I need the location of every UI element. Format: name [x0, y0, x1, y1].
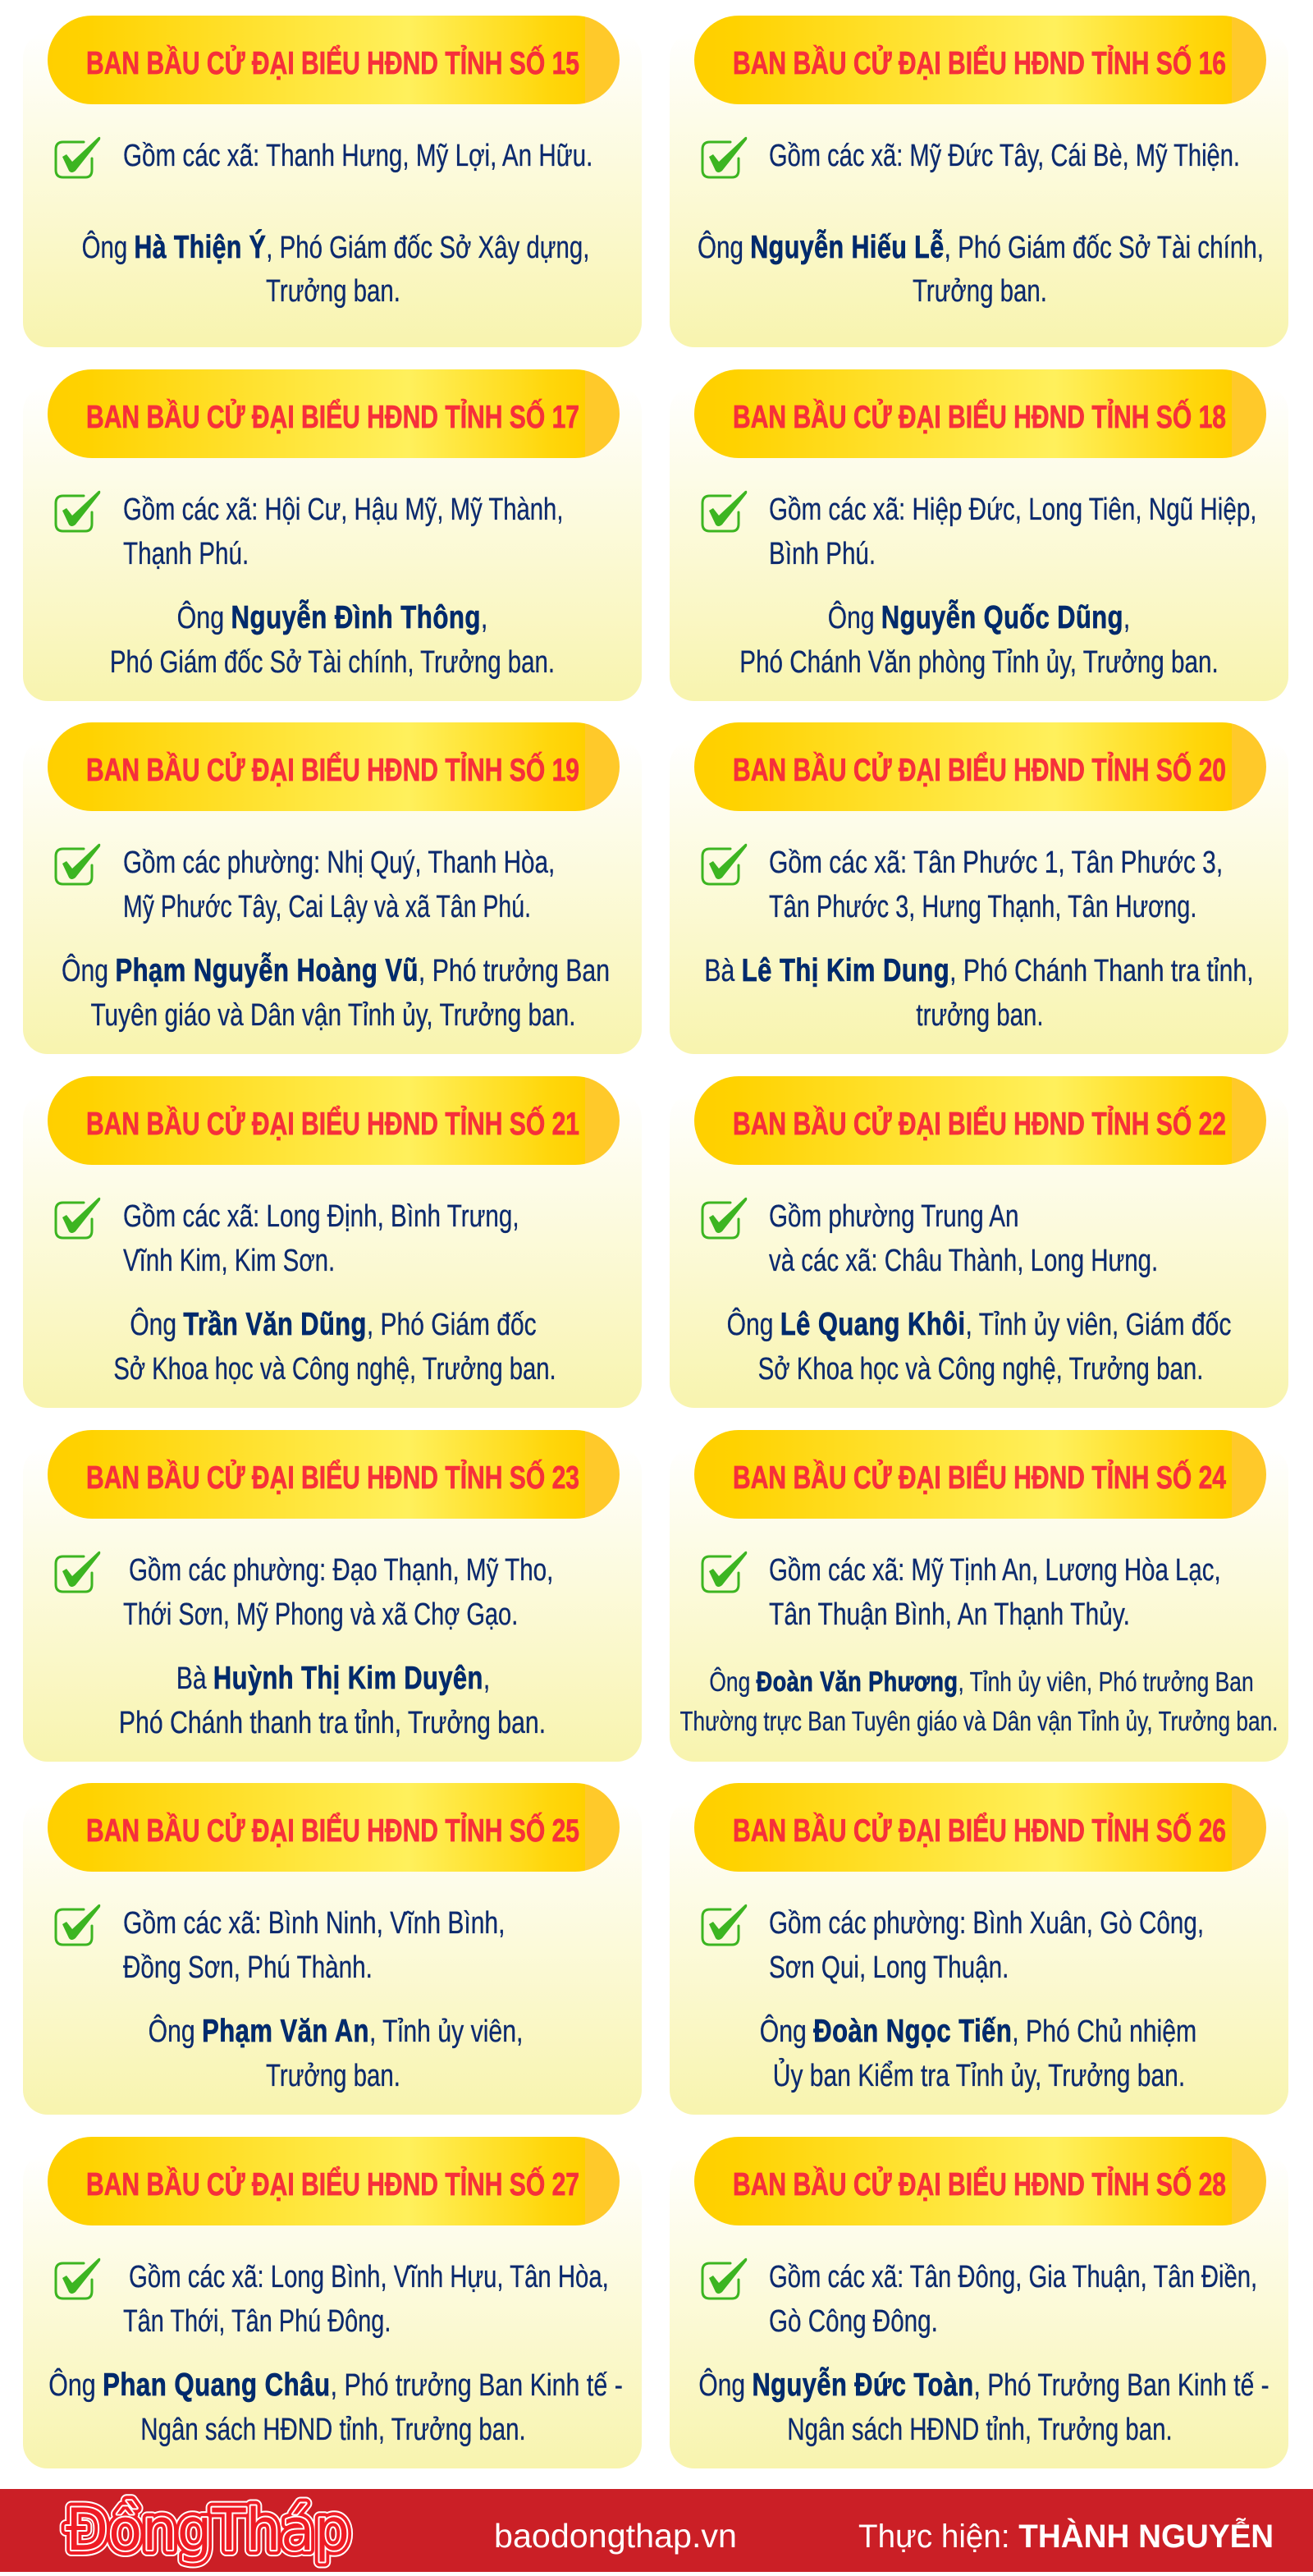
- credit: Thực hiện: THÀNH NGUYỄN: [858, 2518, 1274, 2555]
- icon: check: [702, 1904, 747, 1945]
- text: head line 2: Phó Chánh Văn phòng Tỉnh ủy, Trưởng ban.: [739, 645, 1219, 680]
- panel background and header pill: [23, 2137, 642, 2468]
- panel: ban 20: [670, 722, 1288, 1054]
- heading: BAN BẦU CỬ ĐẠI BIỂU HĐND TỈNH SỐ 17: [86, 398, 579, 435]
- panel: ban 28: [670, 2137, 1288, 2468]
- heading: BAN BẦU CỬ ĐẠI BIỂU HĐND TỈNH SỐ 27: [86, 2166, 579, 2202]
- text: head line 1: Ông Đoàn Văn Phương, Tỉnh ủy viên, Phó trưởng Ban: [709, 1666, 1254, 1698]
- text: head line 2: Sở Khoa học và Công nghệ, Trưởng ban.: [113, 1351, 556, 1387]
- text: area: Gồm các xã: Thanh Hưng, Mỹ Lợi, An Hữu.: [123, 139, 592, 173]
- text: area: Gồm các phường: Bình Xuân, Gò Công,: [769, 1906, 1204, 1941]
- text: area line 2: Tân Thuận Bình, An Thạnh Thủy.: [769, 1597, 1130, 1632]
- footer: [0, 2489, 1313, 2572]
- logo: ĐồngTháp: [66, 2496, 350, 2564]
- text: area: Gồm các xã: Bình Ninh, Vĩnh Bình,: [123, 1906, 505, 1941]
- icon: check: [702, 137, 747, 177]
- panel background and header pill: [23, 1430, 642, 1762]
- panel: ban 25: [23, 1783, 642, 2115]
- icon: check: [702, 2258, 747, 2299]
- text: area line 2: Tân Thới, Tân Phú Đông.: [123, 2303, 391, 2339]
- text: head line 2: Ngân sách HĐND tỉnh, Trưởng ban.: [140, 2412, 526, 2447]
- heading: BAN BẦU CỬ ĐẠI BIỂU HĐND TỈNH SỐ 19: [86, 751, 579, 788]
- panel: ban 27: [23, 2137, 642, 2468]
- panel: ban 23: [23, 1430, 642, 1762]
- panel background and header pill: [670, 369, 1288, 701]
- icon: check: [56, 2258, 100, 2299]
- heading: BAN BẦU CỬ ĐẠI BIỂU HĐND TỈNH SỐ 21: [86, 1105, 579, 1142]
- panel background and header pill: [670, 1430, 1288, 1762]
- panel: ban 22: [670, 1076, 1288, 1408]
- text: head line 1: Ông Nguyễn Đức Toàn, Phó Trưởng Ban Kinh tế -: [698, 2366, 1270, 2403]
- icon: check: [702, 491, 747, 531]
- text: area: Gồm các phường: Đạo Thạnh, Mỹ Tho,: [129, 1553, 553, 1588]
- logo: ĐồngTháp: [66, 2496, 350, 2564]
- text: area line 2: Gò Công Đông.: [769, 2304, 938, 2339]
- icon: check: [702, 1198, 747, 1238]
- panel background and header pill: [23, 1783, 642, 2115]
- text: head line 1: Ông Đoàn Ngọc Tiến, Phó Chủ nhiệm: [760, 2014, 1196, 2049]
- text: head line 2: Phó Chánh thanh tra tỉnh, Trưởng ban.: [119, 1706, 546, 1740]
- text: head line 1: Ông Hà Thiện Ý, Phó Giám đốc Sở Xây dựng,: [82, 228, 589, 265]
- text: head line 1: Ông Nguyễn Quốc Dũng,: [828, 598, 1130, 635]
- text: head line 1: Ông Phạm Văn An, Tỉnh ủy viên,: [149, 2014, 523, 2049]
- text: area: Gồm các xã: Tân Đông, Gia Thuận, Tân Điền,: [769, 2259, 1257, 2294]
- text: area: Gồm các xã: Mỹ Tịnh An, Lương Hòa Lạc,: [769, 1552, 1221, 1588]
- panel background and header pill: [670, 1783, 1288, 2115]
- text: head line 2: Tuyên giáo và Dân vận Tỉnh ủy, Trưởng ban.: [90, 998, 576, 1033]
- text: area line 2: Đồng Sơn, Phú Thành.: [123, 1950, 373, 1985]
- panel: ban 18: [670, 369, 1288, 701]
- text: area: Gồm phường Trung An: [769, 1199, 1018, 1234]
- text: head line 1: Ông Lê Quang Khôi, Tỉnh ủy viên, Giám đốc: [727, 1307, 1231, 1342]
- icon: check: [702, 1552, 747, 1592]
- panel: ban 26: [670, 1783, 1288, 2115]
- panel background and header pill: [670, 722, 1288, 1054]
- icon: check: [56, 1552, 100, 1592]
- heading: BAN BẦU CỬ ĐẠI BIỂU HĐND TỈNH SỐ 25: [86, 1812, 579, 1849]
- panel: ban 17: [23, 369, 642, 701]
- text: area: Gồm các xã: Long Bình, Vĩnh Hựu, Tân Hòa,: [129, 2259, 609, 2294]
- text: head line 2: trưởng ban.: [916, 997, 1044, 1033]
- text: head line 1: Ông Nguyễn Đình Thông,: [177, 599, 487, 635]
- text: area: Gồm các xã: Hiệp Đức, Long Tiên, Ngũ Hiệp,: [769, 493, 1257, 527]
- text: head line 2: Sở Khoa học và Công nghệ, Trưởng ban.: [758, 1351, 1203, 1387]
- icon: check: [56, 491, 100, 531]
- text: area line 2: Sơn Qui, Long Thuận.: [769, 1950, 1009, 1985]
- panel background and header pill: [23, 1076, 642, 1408]
- panel: ban 16: [670, 16, 1288, 347]
- text: head line 1: Bà Huỳnh Thị Kim Duyên,: [176, 1661, 490, 1696]
- website: baodongthap.vn: [494, 2517, 737, 2555]
- panel: ban 19: [23, 722, 642, 1054]
- text: area: Gồm các xã: Mỹ Đức Tây, Cái Bè, Mỹ Thiện.: [769, 138, 1240, 173]
- icon: check: [56, 1904, 100, 1945]
- text: area line 2: Mỹ Phước Tây, Cai Lậy và xã Tân Phú.: [123, 890, 531, 924]
- text: head line 2: Trưởng ban.: [266, 2058, 400, 2093]
- footer background: [0, 2489, 1313, 2572]
- text: head line 1: Ông Trần Văn Dũng, Phó Giám đốc: [130, 1307, 537, 1342]
- text: head line 2: Thường trực Ban Tuyên giáo và Dân vận Tỉnh ủy, Trưởng ban.: [680, 1707, 1278, 1737]
- text: area: Gồm các phường: Nhị Quý, Thanh Hòa,: [123, 846, 555, 880]
- text: head line 1: Bà Lê Thị Kim Dung, Phó Chánh Thanh tra tỉnh,: [704, 953, 1254, 988]
- text: area line 2: và các xã: Châu Thành, Long Hưng.: [769, 1243, 1158, 1278]
- panel: ban 15: [23, 16, 642, 347]
- text: area: Gồm các xã: Long Định, Bình Trưng,: [123, 1199, 519, 1234]
- panel background and header pill: [23, 16, 642, 347]
- panel background and header pill: [670, 16, 1288, 347]
- icon: check: [56, 137, 100, 177]
- text: head line 2: Ủy ban Kiểm tra Tỉnh ủy, Trưởng ban.: [773, 2056, 1185, 2093]
- icon: check: [56, 844, 100, 884]
- text: area line 2: Vĩnh Kim, Kim Sơn.: [123, 1243, 335, 1278]
- text: area: Gồm các xã: Tân Phước 1, Tân Phước 3,: [769, 846, 1223, 880]
- icon: check: [702, 844, 747, 884]
- icon: check: [56, 1198, 100, 1238]
- text: area: Gồm các xã: Hội Cư, Hậu Mỹ, Mỹ Thành,: [123, 492, 563, 527]
- text: area line 2: Thới Sơn, Mỹ Phong và xã Chợ Gạo.: [123, 1597, 518, 1632]
- text: head line 2: Trưởng ban.: [266, 273, 400, 309]
- panel: ban 24: [670, 1430, 1288, 1762]
- heading: BAN BẦU CỬ ĐẠI BIỂU HĐND TỈNH SỐ 15: [86, 44, 579, 81]
- text: head line 2: Trưởng ban.: [913, 273, 1047, 309]
- heading: BAN BẦU CỬ ĐẠI BIỂU HĐND TỈNH SỐ 23: [86, 1459, 579, 1496]
- text: head line 2: Phó Giám đốc Sở Tài chính, Trưởng ban.: [110, 644, 555, 680]
- text: area line 2: Bình Phú.: [769, 537, 876, 571]
- logo: ĐồngTháp: [66, 2496, 350, 2564]
- text: head line 2: Ngân sách HĐND tỉnh, Trưởng ban.: [787, 2412, 1173, 2447]
- text: head line 1: Ông Phan Quang Châu, Phó trưởng Ban Kinh tế -: [48, 2367, 623, 2403]
- text: area line 2: Tân Phước 3, Hưng Thạnh, Tân Hương.: [769, 889, 1196, 924]
- logo: ĐồngTháp: [66, 2496, 350, 2564]
- text: head line 1: Ông Nguyễn Hiếu Lễ, Phó Giám đốc Sở Tài chính,: [698, 228, 1264, 265]
- panel: ban 21: [23, 1076, 642, 1408]
- panel background and header pill: [670, 2137, 1288, 2468]
- panel background and header pill: [23, 369, 642, 701]
- panel background and header pill: [670, 1076, 1288, 1408]
- panel background and header pill: [23, 722, 642, 1054]
- text: area line 2: Thạnh Phú.: [123, 537, 249, 571]
- text: head line 1: Ông Phạm Nguyễn Hoàng Vũ, Phó trưởng Ban: [62, 952, 610, 988]
